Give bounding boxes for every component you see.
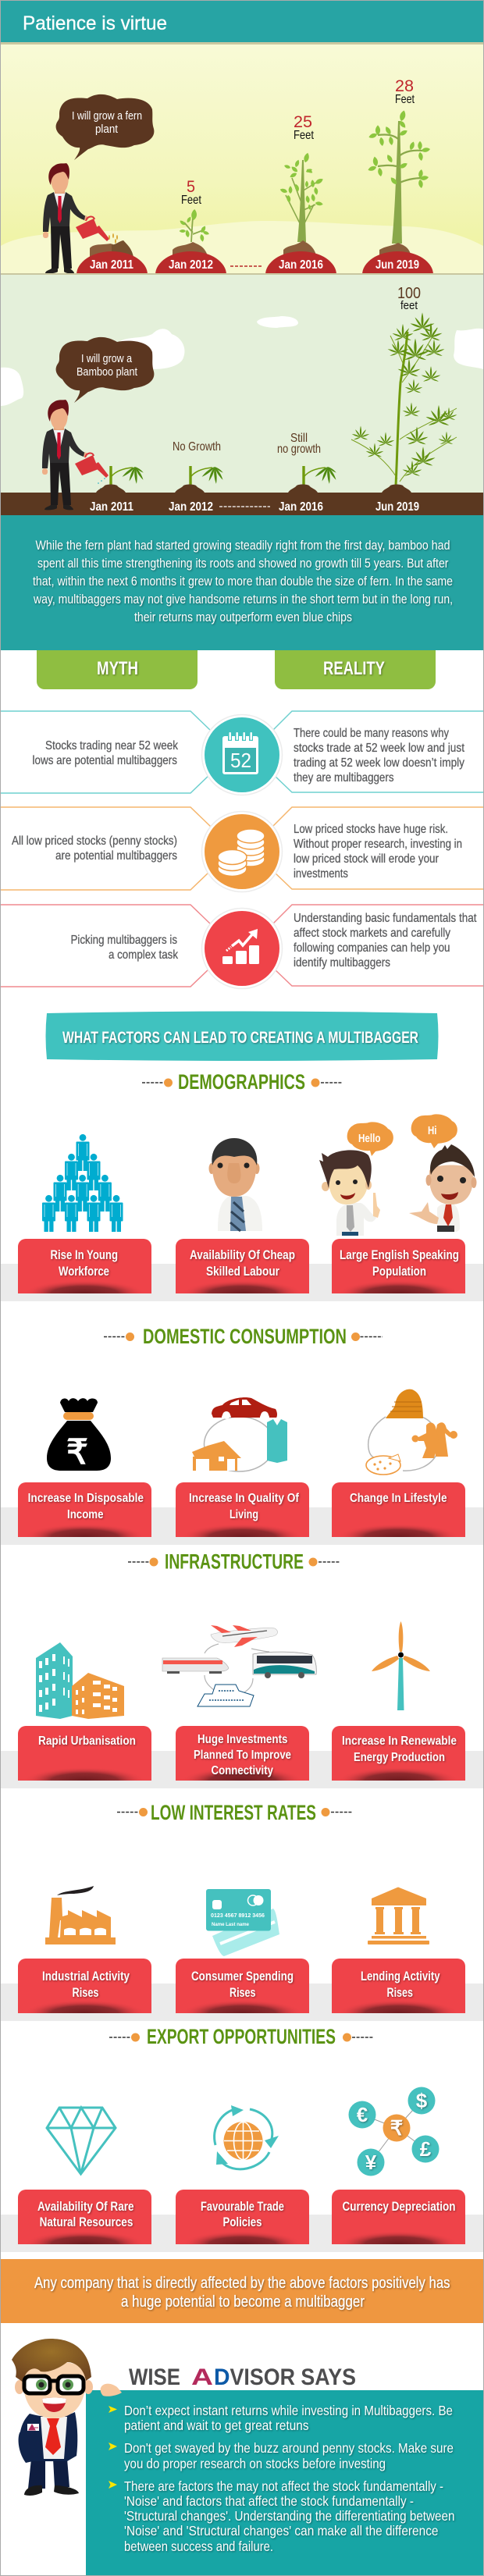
myth text: [12, 834, 177, 863]
icon: buildings: [36, 1642, 124, 1719]
reality text: affect stock markets and carefully: [294, 927, 450, 940]
myth text: Stocks trading near 52 week: [45, 739, 179, 753]
card: industrial activity: Industrial Activity: [42, 1969, 130, 1984]
card: huge investments: [176, 1726, 309, 1794]
card: lending activity: Lending Activity: [361, 1969, 440, 1984]
tall bamboo 100 feet Jun 2019: 100: [397, 285, 421, 302]
icon: lifestyle cluster: [366, 1389, 457, 1475]
icon: bank: [368, 1888, 429, 1944]
title bar: Patience is virtue: [1, 1, 483, 44]
card: availability of rare natural resources: Natural Resources: [40, 2215, 133, 2229]
date labels: Jun 2019: [375, 500, 419, 514]
icon: people pyramid: [42, 1134, 123, 1232]
card: lending activity: [332, 1959, 465, 2026]
card: consumer spending: Rises: [230, 1985, 256, 2000]
card: quality of living: Increase In Quality Of: [189, 1492, 300, 1505]
clouds: [1, 316, 484, 406]
fern seed mound Jan 2011: Jan 2011: [90, 258, 133, 272]
myth text: lows are potential multibaggers: [33, 754, 177, 767]
card: large english speaking population: [332, 1239, 465, 1307]
card: industrial activity: Rises: [72, 1985, 98, 2000]
reality text: following companies can help you: [294, 941, 450, 955]
heading: low interest rates: LOW INTEREST RATES: [151, 1801, 316, 1824]
reality text: identify multibaggers: [294, 956, 390, 970]
speech bubble: fern: I will grow a fern: [72, 109, 142, 123]
speech bubble: bamboo: [56, 337, 154, 403]
icon: money bag: ₹: [66, 1433, 88, 1471]
fern 28 feet Jun 2019: 28: [395, 77, 414, 95]
panel: fern growth: [1, 44, 483, 275]
bamboo shoot Jan 2016 with Still no growth label: no growth: [277, 443, 321, 456]
card: disposable income: Increase In Disposable: [28, 1492, 144, 1505]
card: quality of living: [176, 1482, 309, 1550]
bamboo shoot Jan 2016 with Still no growth label: [277, 432, 337, 493]
icon: calendar 52: 52: [230, 749, 251, 772]
card: consumer spending: [176, 1959, 309, 2026]
heading: wise advisor says: WISE: [129, 2364, 180, 2390]
icon: skilled professional: [209, 1138, 262, 1231]
card: disposable income: Income: [67, 1508, 104, 1521]
card: quality of living: Living: [230, 1508, 258, 1521]
card: favourable trade policies: Favourable Trade: [201, 2199, 284, 2214]
tall bamboo 100 feet Jun 2019: feet: [400, 299, 418, 312]
tips list: 'Noise' and 'Structural changes' can make all the difference: [124, 2523, 439, 2539]
bubble: Hi: [411, 1114, 457, 1148]
icon: currency network: £: [420, 2137, 432, 2161]
icon: wind turbine: [372, 1621, 430, 1710]
myth text: are potential multibaggers: [55, 849, 177, 863]
heading: wise advisor says: [129, 2364, 356, 2390]
icon: currency network: [348, 2087, 439, 2176]
reality text: There could be many reasons why: [294, 727, 449, 740]
bamboo shoot Jan 2016 with Still no growth label: Still: [290, 432, 308, 445]
fern 25 feet Jan 2016: [265, 113, 336, 275]
myth text: All low priced stocks (penny stocks): [12, 834, 177, 848]
heading: wise advisor says: VISOR SAYS: [230, 2364, 356, 2390]
heading: domestic consumption: DOMESTIC CONSUMPTION: [143, 1325, 347, 1348]
icon: credit cards: Name Last name: [212, 1922, 249, 1927]
icon: currency network: $: [416, 2089, 428, 2112]
dashed timeline: [230, 265, 262, 267]
heading: demographics: DEMOGRAPHICS: [178, 1070, 305, 1094]
icon: credit cards: [206, 1889, 279, 1956]
card: availability of cheap skilled labour: [176, 1239, 309, 1307]
icon: globe with trade arrows: [215, 2105, 279, 2169]
card: huge investments: Huge Investments: [198, 1733, 288, 1746]
fern 5 feet Jan 2012: 5: [187, 178, 195, 196]
tips list: between success and failure.: [124, 2539, 273, 2554]
water drops: [98, 478, 109, 491]
card: availability of rare natural resources: [18, 2190, 151, 2258]
card: availability of rare natural resources: Availability Of Rare: [37, 2199, 134, 2214]
reality text: [294, 912, 477, 970]
icon: money bag: [47, 1398, 111, 1471]
icon: currency network: ₹: [390, 2116, 403, 2140]
fern 28 feet Jun 2019: Feet: [395, 93, 415, 106]
fern 25 feet Jan 2016: Jan 2016: [279, 258, 323, 272]
icon: calendar 52: [201, 715, 283, 795]
panel: wise advisor tips: [12, 2339, 483, 2575]
icon: factory: [45, 1886, 116, 1944]
mascot hand: [101, 2384, 122, 2396]
icon: currency network: ¥: [365, 2151, 377, 2174]
fern seed mound Jan 2011: [77, 233, 148, 275]
tips list: [109, 2403, 454, 2554]
reality text: investments: [294, 867, 348, 881]
fern 28 feet Jun 2019: [362, 77, 433, 275]
fern 25 feet Jan 2016: 25: [294, 113, 312, 131]
card: rise in young workforce: Rise In Young: [50, 1247, 118, 1262]
man watering fern: [43, 163, 109, 273]
tips list: you do proper research on stocks before investing: [124, 2456, 386, 2471]
tips list: patient and wait to get great retuns: [124, 2418, 309, 2433]
bubble: Hello: [347, 1122, 393, 1156]
card: rapid urbanisation: Rapid Urbanisation: [38, 1735, 136, 1748]
card: availability of cheap skilled labour: Availability Of Cheap: [190, 1247, 295, 1262]
reality text: Low priced stocks have huge risk.: [294, 823, 448, 836]
card: large english speaking population: Population: [372, 1264, 426, 1279]
heading: export opportunities: EXPORT OPPORTUNITIES: [147, 2025, 336, 2048]
fern 28 feet Jun 2019: Jun 2019: [375, 258, 419, 272]
card: consumer spending: Consumer Spending: [191, 1969, 294, 1984]
reality header: [275, 650, 436, 689]
bamboo shoot Jan 2012 with No Growth label: [173, 440, 224, 493]
title bar: Patience is virtue: Patience is virtue: [23, 12, 167, 34]
bubble: Hi: Hi: [428, 1124, 437, 1137]
card: renewable energy: Increase In Renewable: [342, 1735, 457, 1748]
date labels: Jan 2012: [169, 500, 213, 514]
fern 5 feet Jan 2012: Feet: [181, 194, 201, 207]
icon: rising chart: [201, 909, 283, 988]
date labels: [90, 500, 419, 514]
card: lending activity: Rises: [387, 1985, 413, 2000]
bamboo shoot Jan 2012 with No Growth label: No Growth: [173, 440, 221, 454]
heading: wise advisor says: A: [191, 2364, 213, 2390]
heading: wise advisor says: D: [214, 2364, 230, 2390]
icon: credit cards: 0123 4567 8912 3456: [211, 1913, 265, 1919]
reality text: low priced stock will erode your: [294, 852, 440, 866]
speech bubble: fern: plant: [95, 123, 119, 136]
icon: transport connectivity: [162, 1625, 316, 1706]
row: complex task: [1, 905, 483, 988]
card: favourable trade policies: [176, 2190, 309, 2258]
icon: talking professionals: [319, 1114, 476, 1236]
myth text: Picking multibaggers is: [70, 934, 177, 947]
row: 52 week lows: [1, 711, 483, 795]
speech bubble: bamboo: Bamboo plant: [77, 365, 138, 379]
card: change in lifestyle: [332, 1482, 465, 1550]
mascot: wise advisor: [12, 2339, 93, 2496]
myth header: [37, 650, 198, 689]
card: currency depreciation: [332, 2190, 465, 2258]
fern 5 feet Jan 2012: Jan 2012: [169, 258, 213, 272]
card: huge investments: Planned To Improve: [194, 1749, 291, 1762]
card: renewable energy: [332, 1726, 465, 1794]
card: huge investments: Connectivity: [211, 1764, 273, 1777]
card: renewable energy: Energy Production: [354, 1751, 445, 1764]
tips list: 'Noise' and factors that affect the stock fundamentally -: [124, 2493, 414, 2509]
myth header: MYTH: [97, 658, 138, 679]
panel: teal explanation: [1, 515, 483, 650]
card: availability of cheap skilled labour: Skilled Labour: [206, 1264, 279, 1279]
fern 25 feet Jan 2016: Feet: [294, 129, 314, 142]
reality text: they are multibaggers: [294, 771, 393, 785]
card: currency depreciation: Currency Depreciation: [342, 2199, 456, 2214]
fern 5 feet Jan 2012: [155, 178, 226, 275]
speech bubble: fern: [56, 94, 154, 160]
panel: bamboo growth: [1, 275, 484, 515]
panel: orange conclusion: a huge potential to become a multibagger: [121, 2293, 365, 2311]
date labels: Jan 2016: [279, 500, 323, 514]
speech bubble: bamboo: I will grow a: [81, 352, 133, 365]
brown ground: [1, 493, 483, 515]
reality text: [294, 823, 462, 881]
icon: quality of living cluster: [192, 1397, 287, 1471]
card: favourable trade policies: Policies: [223, 2215, 262, 2229]
myth text: [33, 739, 179, 767]
reality text: [294, 727, 464, 785]
date labels: Jan 2011: [90, 500, 133, 514]
icon: diamond: [47, 2108, 116, 2174]
icon: coins: [201, 812, 283, 891]
tall bamboo 100 feet Jun 2019: [351, 285, 457, 493]
heading: infrastructure: INFRASTRUCTURE: [165, 1550, 304, 1574]
man watering bamboo: [42, 400, 109, 510]
banner: what factors: [45, 1012, 439, 1061]
card: disposable income: [18, 1482, 151, 1550]
panel: teal explanation: their returns may outperform even blue chips: [134, 610, 352, 624]
myth text: [70, 934, 179, 962]
bamboo shoot Jan 2011: [96, 466, 144, 493]
icon: currency network: €: [357, 2103, 368, 2126]
card: industrial activity: [18, 1959, 151, 2026]
row: penny stocks: [1, 807, 483, 891]
card: rise in young workforce: [18, 1239, 151, 1307]
reality header: REALITY: [323, 658, 385, 679]
card: rise in young workforce: Workforce: [59, 1264, 109, 1279]
bubble: Hello: Hello: [358, 1132, 381, 1145]
myth text: a complex task: [109, 948, 179, 962]
card: rapid urbanisation: [18, 1726, 151, 1794]
card: change in lifestyle: Change In Lifestyle: [350, 1492, 447, 1505]
panel: orange conclusion: [1, 2259, 483, 2323]
